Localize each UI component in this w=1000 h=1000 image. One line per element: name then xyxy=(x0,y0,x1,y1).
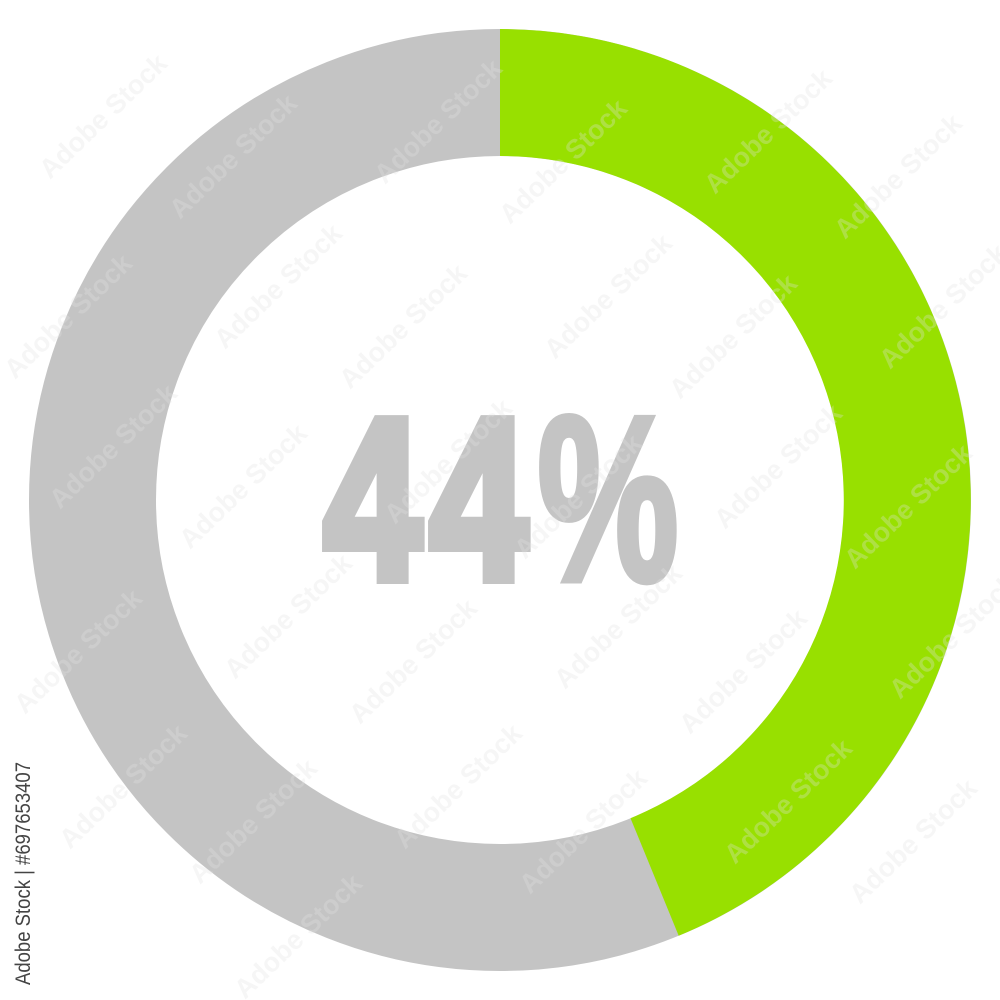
watermark pattern: Adobe Stock xyxy=(163,87,304,224)
watermark pattern: Adobe Stock xyxy=(673,602,814,739)
watermark pattern: Adobe Stock xyxy=(173,417,314,554)
percent sign: % xyxy=(538,367,678,630)
watermark pattern: Adobe Stock xyxy=(698,62,839,199)
first digit 4: 4 xyxy=(324,373,421,627)
watermark pattern: Adobe Stock xyxy=(183,752,324,889)
watermark pattern: Adobe Stock xyxy=(708,397,849,534)
side credit text: Adobe Stock | #697653407 xyxy=(12,762,35,985)
watermark pattern: Adobe Stock xyxy=(0,247,139,384)
watermark pattern: Adobe Stock xyxy=(378,392,519,529)
watermark pattern: Adobe Stock xyxy=(43,377,184,514)
gray remainder segment xyxy=(92,92,908,908)
watermark pattern: Adobe Stock xyxy=(218,547,359,684)
watermark pattern: Adobe Stock xyxy=(333,257,474,394)
watermark pattern: Adobe Stock xyxy=(33,47,174,184)
watermark pattern: Adobe Stock xyxy=(718,732,859,869)
donut chart xyxy=(92,29,971,936)
watermark pattern: Adobe Stock xyxy=(493,92,634,229)
watermark pattern: Adobe Stock xyxy=(508,427,649,564)
percentage label xyxy=(324,367,678,630)
second digit 4: 4 xyxy=(430,373,527,627)
watermark pattern: Adobe Stock xyxy=(208,217,349,354)
watermark pattern: Adobe Stock xyxy=(343,592,484,729)
watermark pattern: Adobe Stock xyxy=(663,267,804,404)
watermark pattern: Adobe Stock xyxy=(548,557,689,694)
watermark pattern: Adobe Stock xyxy=(513,762,654,899)
watermark pattern: Adobe Stock xyxy=(388,717,529,854)
watermark pattern: Adobe Stock xyxy=(368,52,509,189)
watermark pattern: Adobe Stock xyxy=(8,582,149,719)
watermark pattern: Adobe Stock xyxy=(843,772,984,909)
watermark pattern: Adobe Stock xyxy=(828,107,969,244)
green 44 percent segment xyxy=(500,29,971,936)
watermark pattern: Adobe Stock xyxy=(53,717,194,854)
watermark pattern: Adobe Stock xyxy=(538,227,679,364)
watermark pattern: Adobe Stock xyxy=(838,437,979,574)
